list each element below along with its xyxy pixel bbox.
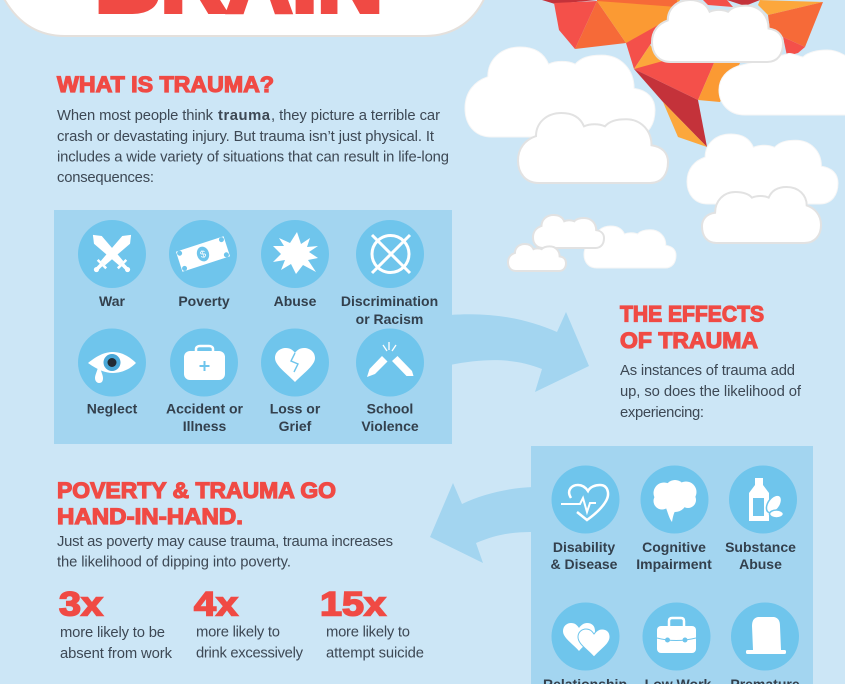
icon: relationship bbox=[552, 602, 620, 670]
stat: 3x: more likely to be bbox=[60, 625, 165, 641]
stat: 15x: attempt suicide bbox=[326, 646, 424, 662]
stat: 15x: 15x bbox=[320, 586, 386, 624]
label: neglect: Neglect bbox=[87, 400, 138, 416]
text block: effects intro: up, so does the likelihood of bbox=[620, 384, 802, 400]
label: school violence: School bbox=[367, 400, 413, 416]
stat: 3x: 3x bbox=[59, 586, 103, 624]
label: discrimination: or Racism bbox=[356, 311, 423, 327]
stat: 3x bbox=[59, 586, 173, 662]
text block: effects intro: experiencing: bbox=[620, 405, 704, 421]
icon: poverty: $ bbox=[199, 249, 208, 261]
label: accident or illness: Illness bbox=[183, 418, 226, 434]
stat: 4x: more likely to bbox=[196, 624, 280, 640]
panel: effects of trauma bbox=[531, 446, 813, 684]
label: poverty: Poverty bbox=[178, 293, 230, 309]
heading: poverty and trauma bbox=[57, 478, 336, 529]
label: substance: Substance bbox=[725, 539, 796, 555]
label: loss or grief: Loss or bbox=[270, 400, 321, 416]
title banner bbox=[2, 0, 486, 36]
heading: poverty and trauma: POVERTY & TRAUMA GO bbox=[57, 478, 336, 503]
label: abuse: Abuse bbox=[274, 293, 317, 309]
cloud: right edge bbox=[719, 50, 845, 115]
heading: what is trauma: WHAT IS TRAUMA? bbox=[57, 72, 274, 97]
cloud: small left bbox=[508, 244, 566, 271]
stat: 15x bbox=[320, 586, 424, 662]
polygon brain illustration bbox=[542, 0, 823, 147]
heading: the effects of trauma: OF TRAUMA bbox=[620, 328, 758, 353]
icon: disability bbox=[552, 466, 620, 534]
label: cognitive: Impairment bbox=[636, 556, 712, 572]
text block: trauma intro bbox=[57, 108, 449, 186]
label: cognitive: Cognitive bbox=[642, 539, 706, 555]
text block: trauma intro: trauma bbox=[218, 108, 271, 124]
label: accident or illness: Accident or bbox=[166, 400, 244, 416]
text block: trauma intro: includes a wide variety of situations that can result in life-long bbox=[57, 150, 449, 166]
icon: war bbox=[78, 220, 146, 288]
icon: premature death bbox=[731, 602, 799, 670]
icon: school violence bbox=[356, 328, 424, 396]
label: substance: Abuse bbox=[739, 556, 782, 572]
stat: 4x: drink excessively bbox=[196, 646, 304, 662]
cloud: right middle bbox=[687, 134, 838, 204]
text block: poverty intro: the likelihood of dipping into poverty. bbox=[57, 554, 291, 570]
cloud: large left bbox=[465, 47, 655, 137]
cloud: lower left overlap bbox=[518, 113, 668, 183]
text block: poverty intro: Just as poverty may cause trauma, trauma increases bbox=[57, 534, 393, 550]
cloud: over brain bbox=[652, 0, 783, 62]
stat: 4x: 4x bbox=[194, 586, 238, 624]
text block: effects intro bbox=[620, 363, 802, 421]
label: disability: & Disease bbox=[551, 556, 618, 572]
heading: poverty and trauma: HAND-IN-HAND. bbox=[57, 504, 243, 529]
icon: abuse bbox=[261, 220, 329, 288]
heading: the effects of trauma bbox=[620, 302, 764, 353]
stat: 3x: absent from work bbox=[60, 646, 173, 662]
heading: the effects of trauma: THE EFFECTS bbox=[620, 302, 764, 326]
text block: poverty intro bbox=[57, 534, 393, 570]
cloud: small top bbox=[533, 215, 604, 248]
panel: types of trauma bbox=[54, 210, 452, 444]
text block: trauma intro: crash or devastating injury. But trauma isn’t just physical. It bbox=[57, 129, 434, 145]
text block: trauma intro: , they picture a terrible car bbox=[271, 108, 440, 124]
arrow: to poverty bbox=[430, 483, 533, 563]
cloud: right lower bbox=[702, 187, 821, 243]
label: disability bbox=[551, 539, 618, 572]
label: discrimination bbox=[341, 293, 438, 327]
arrow: to effects bbox=[450, 312, 589, 392]
icon: loss bbox=[261, 328, 329, 396]
text block: trauma intro: consequences: bbox=[57, 170, 154, 186]
label: school violence bbox=[361, 400, 419, 434]
icon: cognitive bbox=[640, 466, 708, 534]
text block: trauma intro: When most people think bbox=[57, 108, 214, 124]
label: school violence: Violence bbox=[361, 418, 419, 434]
label: disability: Disability bbox=[553, 539, 615, 555]
icon: accident bbox=[170, 328, 238, 396]
cloud: small right bbox=[584, 226, 676, 268]
text block: effects intro: As instances of trauma add bbox=[620, 363, 795, 379]
icon: neglect bbox=[78, 328, 146, 396]
icon: discrimination bbox=[356, 220, 424, 288]
label: substance bbox=[725, 539, 796, 572]
stat: 15x: more likely to bbox=[326, 624, 410, 640]
icon: low work bbox=[642, 602, 710, 670]
stat: 4x bbox=[194, 586, 304, 662]
label: loss or grief bbox=[270, 400, 321, 434]
label: accident or illness bbox=[166, 400, 244, 434]
label: cognitive bbox=[636, 539, 712, 572]
icon: poverty bbox=[169, 220, 237, 288]
label: discrimination: Discrimination bbox=[341, 293, 438, 309]
icon: substance bbox=[729, 466, 797, 534]
label: war: War bbox=[99, 293, 126, 309]
label: loss or grief: Grief bbox=[279, 418, 312, 434]
